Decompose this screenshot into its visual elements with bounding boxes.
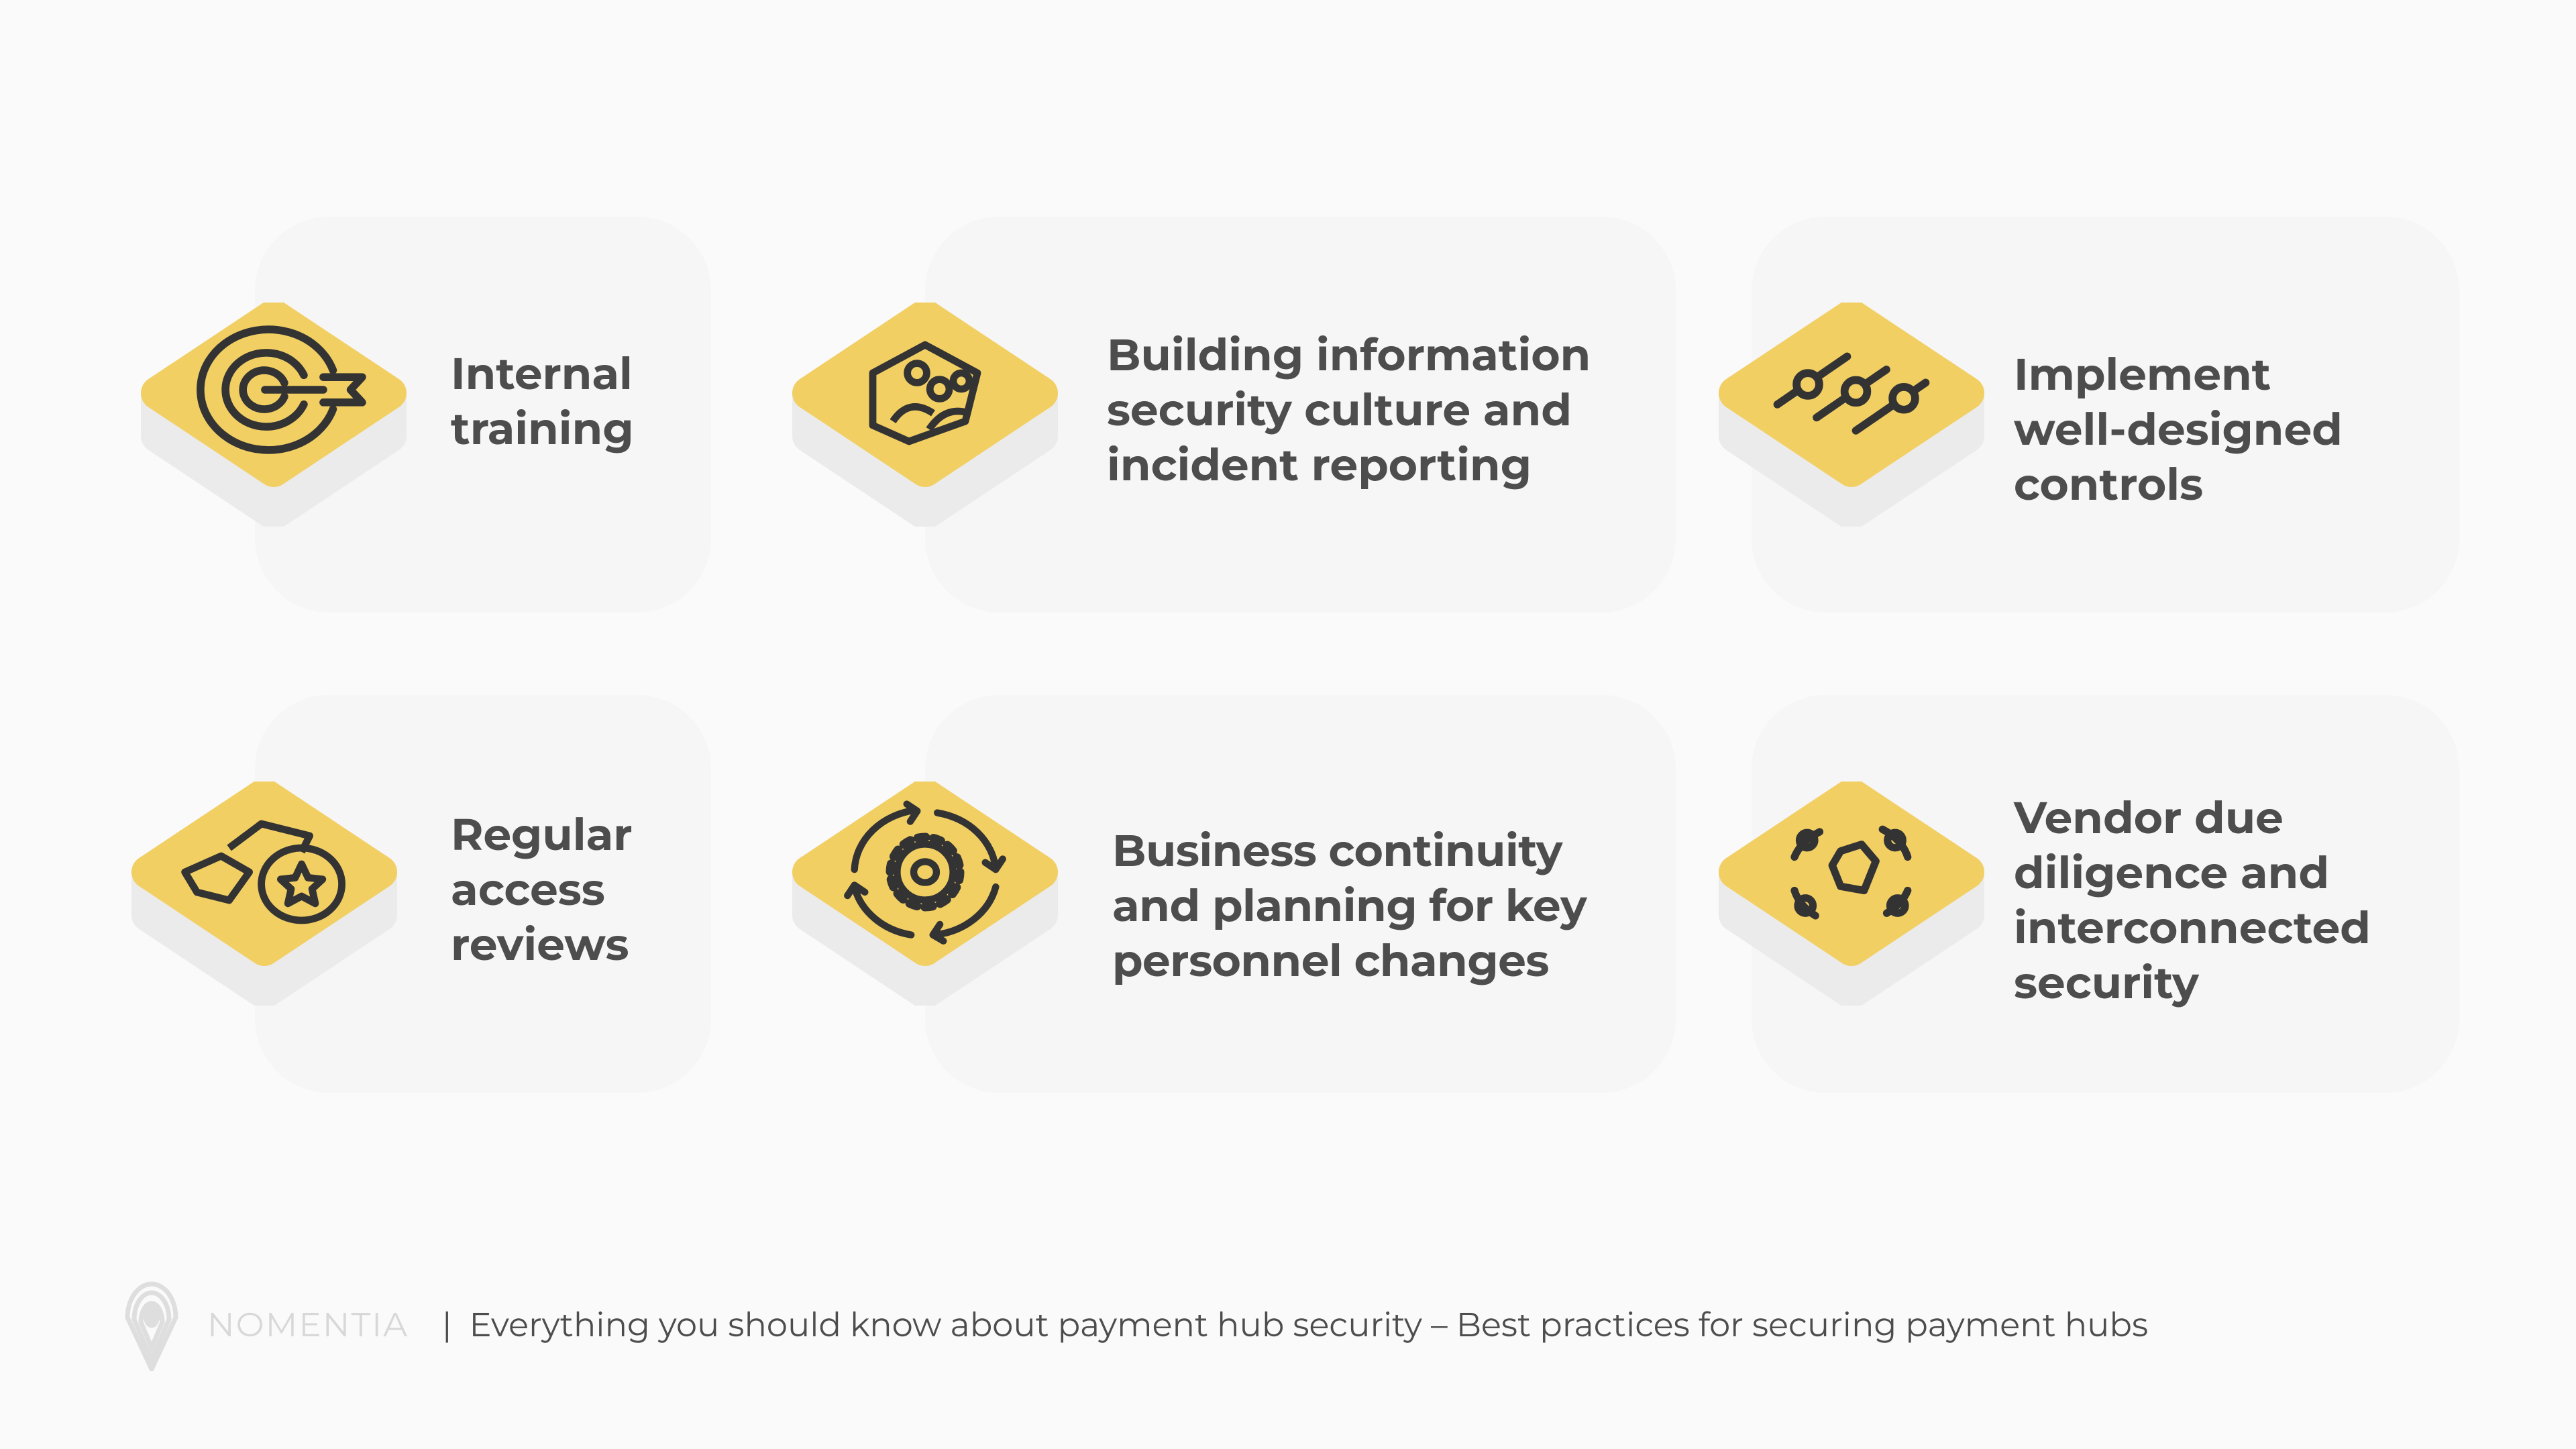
footer: [125, 1281, 2148, 1371]
card: controls: [1752, 217, 2459, 612]
icon tile: shield people: [792, 303, 1058, 527]
text: access reviews: [451, 807, 633, 971]
text: vendor diligence: interconnected: [2014, 900, 2371, 955]
text: security culture: Building information: [1107, 327, 1591, 382]
card: security culture: [925, 217, 1676, 612]
footer caption: | Everything you should know about payment hub security – Best practices for securing payment hubs: [442, 1305, 2148, 1345]
text: internal training: Internal: [451, 346, 633, 400]
icon tile: target: [141, 303, 407, 527]
text: vendor diligence: Vendor due: [2014, 790, 2284, 845]
text: security culture: security culture and: [1107, 382, 1572, 437]
icon tile: cards and star: [131, 782, 397, 1006]
text: business continuity: personnel changes: [1112, 933, 1549, 987]
text: access reviews: Regular: [451, 807, 633, 861]
card: internal training: [255, 217, 711, 612]
text: access reviews: access: [451, 862, 605, 916]
text: business continuity: and planning for key: [1112, 878, 1587, 932]
text: controls: Implement: [2014, 347, 2271, 401]
icon tile: network shield: [1719, 782, 1984, 1006]
text: access reviews: reviews: [451, 917, 629, 971]
text: vendor diligence: [2014, 790, 2371, 1010]
card: access reviews: [255, 695, 711, 1093]
icon tile: sliders: [1719, 303, 1984, 527]
text: business continuity: [1112, 823, 1587, 987]
text: controls: controls: [2014, 457, 2203, 511]
text: controls: well-designed: [2014, 402, 2343, 456]
logo icon: [125, 1281, 178, 1371]
text: security culture: [1107, 327, 1591, 492]
card: business continuity: [925, 695, 1676, 1093]
text: internal training: [451, 346, 634, 455]
text: internal training: training: [451, 401, 634, 455]
text: vendor diligence: diligence and: [2014, 845, 2329, 900]
text: controls: [2014, 347, 2343, 511]
text: business continuity: Business continuity: [1112, 823, 1562, 877]
text: vendor diligence: security: [2014, 955, 2199, 1010]
brand name: NOMENTIA: [207, 1304, 409, 1345]
card: vendor diligence: [1752, 695, 2459, 1093]
icon tile: gear cycle: [792, 782, 1058, 1006]
text: security culture: incident reporting: [1107, 437, 1532, 492]
